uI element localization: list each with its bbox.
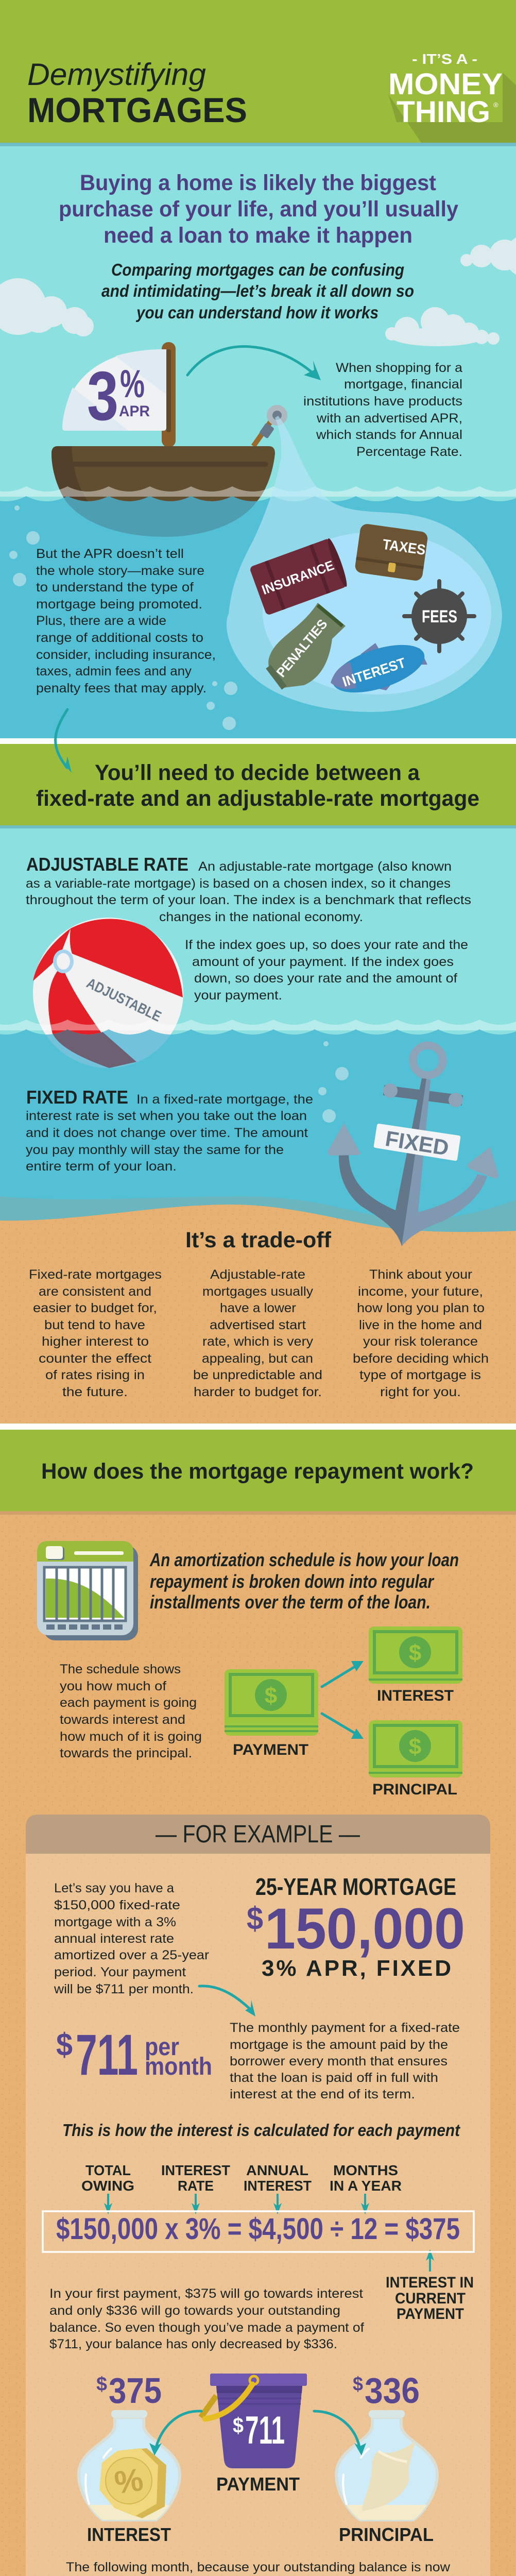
icon: payment bucket: $ [233, 2413, 244, 2437]
text: adjustable rate: An adjustable-rate mortgage (also known [198, 859, 452, 874]
icon: anchor fixed [328, 1045, 498, 1246]
text: fixed rate: In a fixed-rate mortgage, the [136, 1092, 313, 1107]
text: fixed rate: FIXED RATE [26, 1087, 128, 1108]
text: fixed-rate column: counter the effect [39, 1351, 151, 1366]
text: choosing column: live in the home and [359, 1318, 482, 1332]
text: schedule shows: towards the principal. [60, 1746, 192, 1760]
callout: $711 per month: per [145, 2033, 179, 2061]
intro heading: need a loan to make it happen [104, 223, 412, 248]
sailboat with 3% APR sail [51, 342, 287, 501]
panel: rate section sky [0, 828, 516, 1247]
intro heading: purchase of your life, and you’ll usually [59, 197, 458, 222]
text: APR explanation: with an advertised APR, [316, 411, 462, 426]
icon: principal jar with shell [336, 2410, 437, 2520]
text: first payment: $711, your balance has only decreased by $336. [49, 2337, 337, 2351]
title: MORTGAGES [27, 91, 247, 130]
labels: formula terms: TOTAL [85, 2162, 131, 2178]
text: adjustable-rate column: harder to budget for. [194, 1385, 322, 1399]
icon: interest jar with coin: % [112, 2462, 145, 2501]
text: scenario: period. Your payment [54, 1965, 186, 1979]
icon: insurance barrel [249, 537, 350, 616]
icon: insurance barrel: INSURANCE [260, 557, 336, 598]
text: scenario: Let’s say you have a [54, 1881, 174, 1895]
sailboat with 3% APR sail: % [120, 362, 145, 406]
icon: anchor fixed: FIXED [384, 1126, 451, 1160]
text: adjustable rate [26, 854, 471, 1003]
logo: It's a Money Thing [388, 51, 516, 143]
text: fixed rate: entire term of your loan. [26, 1159, 177, 1174]
icon: fees mine [404, 581, 474, 651]
text: scenario: $150,000 fixed-rate [54, 1898, 180, 1912]
intro subheading: Comparing mortgages can be confusing [111, 260, 404, 279]
text: adjustable rate: ADJUSTABLE RATE [26, 854, 188, 875]
callout: $375: 375 [109, 2370, 162, 2411]
labels: formula terms: RATE [178, 2178, 214, 2194]
heading: calculation: This is how the interest is calculated for each payment [62, 2121, 461, 2140]
panel: APR sky and sea [0, 146, 516, 738]
icon: interest fish: INTEREST [340, 655, 408, 690]
callout: 25-year mortgage: 150,000 [265, 1896, 465, 1961]
text: schedule shows: towards interest and [60, 1713, 185, 1727]
callout: 25-year mortgage: 3% APR, FIXED [262, 1956, 451, 1981]
labels: formula terms: OWING [81, 2178, 134, 2194]
arrows: bucket to jars [149, 2411, 366, 2455]
callout: $711 per month [56, 2023, 212, 2087]
text: monthly payment [230, 2021, 460, 2102]
header band [0, 0, 516, 146]
heading: for example: — FOR EXAMPLE — [156, 1821, 360, 1848]
panel: repayment sand background [0, 1511, 516, 2576]
heading band: fixed vs adjustable: fixed-rate and an adjustable-rate mortgage [36, 786, 479, 811]
text: adjustable-rate column: advertised start [210, 1318, 306, 1332]
icon: principal money: PRINCIPAL [372, 1781, 457, 1798]
text: first payment: and only $336 will go towards your outstanding [49, 2303, 340, 2318]
text: adjustable-rate column: mortgages usually [202, 1284, 314, 1299]
arrow [56, 709, 72, 773]
text: choosing column: how long you plan to [357, 1301, 485, 1315]
panel: sand trade-off [0, 1045, 516, 1423]
text: first payment: balance. So even though you’ve made a payment of [49, 2320, 364, 2335]
intro heading: Buying a home is likely the biggest [80, 171, 436, 195]
text: hidden costs: taxes, admin fees and any [36, 664, 192, 679]
text: choosing column: right for you. [380, 1385, 461, 1399]
icon: beach ball: ADJUSTABLE [84, 975, 164, 1025]
text: choosing column: income, your future, [358, 1284, 483, 1299]
text: adjustable rate: If the index goes up, so does your rate and the [185, 938, 468, 952]
spyglass beam [227, 416, 502, 712]
text: fixed-rate column: Fixed-rate mortgages [29, 1267, 162, 1282]
text: scenario: will be $711 per month. [54, 1982, 194, 1996]
text: fixed-rate column: higher interest to [42, 1334, 149, 1349]
labels: jar: PRINCIPAL [339, 2524, 434, 2545]
text: adjustable-rate column: have a lower [220, 1301, 296, 1315]
labels: formula terms: MONTHS [333, 2162, 398, 2178]
text: choosing column [353, 1267, 489, 1399]
text: fixed rate: interest rate is set when you take out the loan [26, 1109, 307, 1123]
text: hidden costs: But the APR doesn’t tell [36, 547, 184, 561]
heading band: fixed vs adjustable [0, 744, 516, 828]
intro subheading [101, 260, 414, 322]
text: scenario: mortgage with a 3% [54, 1915, 176, 1929]
callout: $711 per month: 711 [76, 2023, 138, 2087]
title: Demystifying [27, 57, 206, 92]
icon: payment money stack: PAYMENT [233, 1741, 308, 1758]
callout: $336: 336 [365, 2370, 420, 2411]
text: hidden costs: Plus, there are a wide [36, 614, 166, 628]
heading band: fixed vs adjustable: You’ll need to decide between a [95, 760, 420, 785]
text: choosing column: before deciding which [353, 1351, 489, 1366]
callout: 25-year mortgage: 25-YEAR MORTGAGE [255, 1873, 456, 1900]
text: adjustable-rate column: Adjustable-rate [210, 1267, 305, 1282]
text: adjustable-rate column [193, 1267, 322, 1399]
wave band and sea [0, 486, 516, 738]
text: choosing column: your risk tolerance [363, 1334, 478, 1349]
icon: amortization schedule [37, 1541, 138, 1640]
section divider [0, 738, 516, 744]
text: adjustable rate: changes in the national economy. [159, 910, 363, 924]
text: amortization: installments over the term of the loan. [150, 1591, 431, 1613]
section divider [0, 1423, 516, 1430]
text: adjustable rate: amount of your payment. If the index goes [192, 955, 454, 969]
labels: formula terms: IN A YEAR [330, 2178, 402, 2194]
arrow [187, 347, 321, 380]
text: hidden costs: mortgage being promoted. [36, 597, 202, 612]
bubbles [318, 1041, 349, 1123]
sailboat with 3% APR sail: 3 [87, 357, 118, 435]
text: schedule shows: you how much of [60, 1679, 166, 1693]
text: hidden costs: to understand the type of [36, 580, 194, 595]
text: following month: The following month, because your outstanding balance is now [66, 2560, 451, 2574]
text: amortization: An amortization schedule is how your loan [149, 1549, 459, 1570]
labels: formula terms [81, 2162, 402, 2194]
label: interest in current payment: INTEREST IN [386, 2274, 474, 2291]
text: choosing column: Think about your [369, 1267, 472, 1282]
arrows: formula terms [104, 2194, 434, 2272]
text: amortization [149, 1549, 459, 1613]
text: fixed rate: you pay monthly will stay the same for the [26, 1143, 284, 1157]
text: adjustable-rate column: rate, which is very [202, 1334, 314, 1349]
text: scenario: amortized over a 25-year [54, 1948, 209, 1962]
heading: trade-off: It’s a trade-off [185, 1228, 332, 1252]
callout: 25-year mortgage: $ [247, 1901, 263, 1937]
arrow [199, 1986, 255, 2016]
text: monthly payment: that the loan is paid off in full with [230, 2071, 438, 2085]
text: adjustable rate: your payment. [194, 988, 282, 1003]
callout: 25-year mortgage [247, 1873, 465, 1981]
labels: formula terms: INTEREST [244, 2178, 312, 2194]
text: fixed-rate column [29, 1267, 162, 1399]
icon: interest money: INTEREST [377, 1687, 454, 1704]
icon: taxes chest [354, 523, 428, 582]
text: amortization: repayment is broken down into regular [150, 1571, 435, 1592]
text: fixed-rate column: easier to budget for, [33, 1301, 157, 1315]
text: schedule shows: each payment is going [60, 1696, 197, 1710]
icon: payment bucket: PAYMENT [216, 2473, 300, 2495]
text: monthly payment: The monthly payment for a fixed-rate [230, 2021, 460, 2035]
label: interest in current payment: CURRENT [395, 2290, 466, 2307]
sailboat with 3% APR sail: APR [119, 403, 150, 420]
icon: payment bucket: 711 [245, 2409, 285, 2452]
text: first payment: In your first payment, $375 will go towards interest [49, 2286, 363, 2301]
heading band: repayment: How does the mortgage repayment work? [41, 1459, 474, 1484]
text: monthly payment: borrower every month that ensures [230, 2054, 448, 2069]
labels: formula terms: ANNUAL [246, 2162, 308, 2178]
icon: interest money [369, 1626, 462, 1704]
icon: beach ball [33, 918, 183, 1068]
text: first payment [49, 2286, 364, 2351]
text: APR explanation: mortgage, financial [344, 377, 462, 392]
text: adjustable-rate column: appealing, but can [202, 1351, 313, 1366]
icon: penalties bottle [268, 603, 346, 688]
text: scenario [54, 1881, 209, 1996]
icon: interest jar with coin [79, 2410, 180, 2520]
callout: $336: $ [353, 2374, 363, 2395]
icon: taxes chest: TAXES [382, 536, 426, 558]
labels: formula terms: INTEREST [161, 2162, 230, 2178]
text: monthly payment: interest at the end of its term. [230, 2087, 415, 2102]
text: fixed-rate column: the future. [62, 1385, 128, 1399]
text: fixed-rate column: are consistent and [39, 1284, 151, 1299]
icon: interest fish [327, 635, 430, 702]
text: monthly payment: mortgage is the amount paid by the [230, 2038, 448, 2052]
intro heading [59, 171, 458, 248]
text: APR explanation: Percentage Rate. [356, 445, 462, 459]
labels: jar [87, 2524, 434, 2545]
text: hidden costs [36, 547, 216, 696]
text: APR explanation: institutions have products [303, 394, 462, 409]
text: hidden costs: the whole story—make sure [36, 564, 204, 578]
labels: jar: INTEREST [87, 2524, 171, 2545]
arrows: payment split [322, 1661, 364, 1739]
text: fixed-rate column: but tend to have [44, 1318, 145, 1332]
bubbles [9, 505, 237, 730]
label: interest in current payment: PAYMENT [397, 2306, 464, 2323]
text: APR explanation: When shopping for a [336, 361, 462, 375]
icon: payment bucket [201, 2374, 307, 2495]
text: hidden costs: consider, including insurance, [36, 648, 216, 662]
text: adjustable-rate column: be unpredictable and [193, 1368, 322, 1382]
icon: penalties bottle: PENALTIES [273, 616, 331, 680]
callout: $711 per month: month [145, 2053, 212, 2080]
clouds [0, 235, 516, 346]
text: fixed-rate column: of rates rising in [45, 1368, 145, 1382]
icon: principal money [369, 1720, 462, 1798]
beam inner glow [263, 532, 491, 694]
text: APR explanation: which stands for Annual [316, 428, 462, 442]
text: adjustable rate: as a variable-rate mortgage) is based on a chosen index, so it changes [26, 876, 451, 891]
callout: $711 per month: $ [56, 2027, 73, 2063]
intro subheading: and intimidating—let’s break it all down so [101, 281, 414, 300]
text: scenario: annual interest rate [54, 1931, 174, 1946]
text: APR explanation [303, 361, 462, 459]
label: interest in current payment [386, 2274, 474, 2323]
text: adjustable rate: down, so does your rate and the amount of [194, 971, 457, 986]
intro subheading: you can understand how it works [135, 303, 379, 322]
text: fixed rate: and it does not change over time. The amount [26, 1126, 308, 1140]
text: adjustable rate: throughout the term of your loan. The index is a benchmark that reflects [26, 893, 471, 907]
text: schedule shows [60, 1662, 202, 1760]
icon: fees mine: FEES [422, 607, 457, 626]
text: schedule shows: The schedule shows [60, 1662, 181, 1676]
text: fixed rate [26, 1087, 313, 1174]
text: hidden costs: range of additional costs to [36, 631, 203, 645]
text: choosing column: type of mortgage is [359, 1368, 481, 1382]
text: hidden costs: penalty fees that may apply. [36, 681, 207, 696]
title [27, 57, 247, 130]
wave band and sea [0, 1020, 516, 1221]
callout: $375: $ [96, 2374, 107, 2395]
icon: payment money stack [225, 1669, 318, 1758]
text: schedule shows: how much of it is going [60, 1730, 202, 1744]
heading band: repayment [0, 1430, 516, 1511]
panel: for example [26, 1815, 490, 2576]
